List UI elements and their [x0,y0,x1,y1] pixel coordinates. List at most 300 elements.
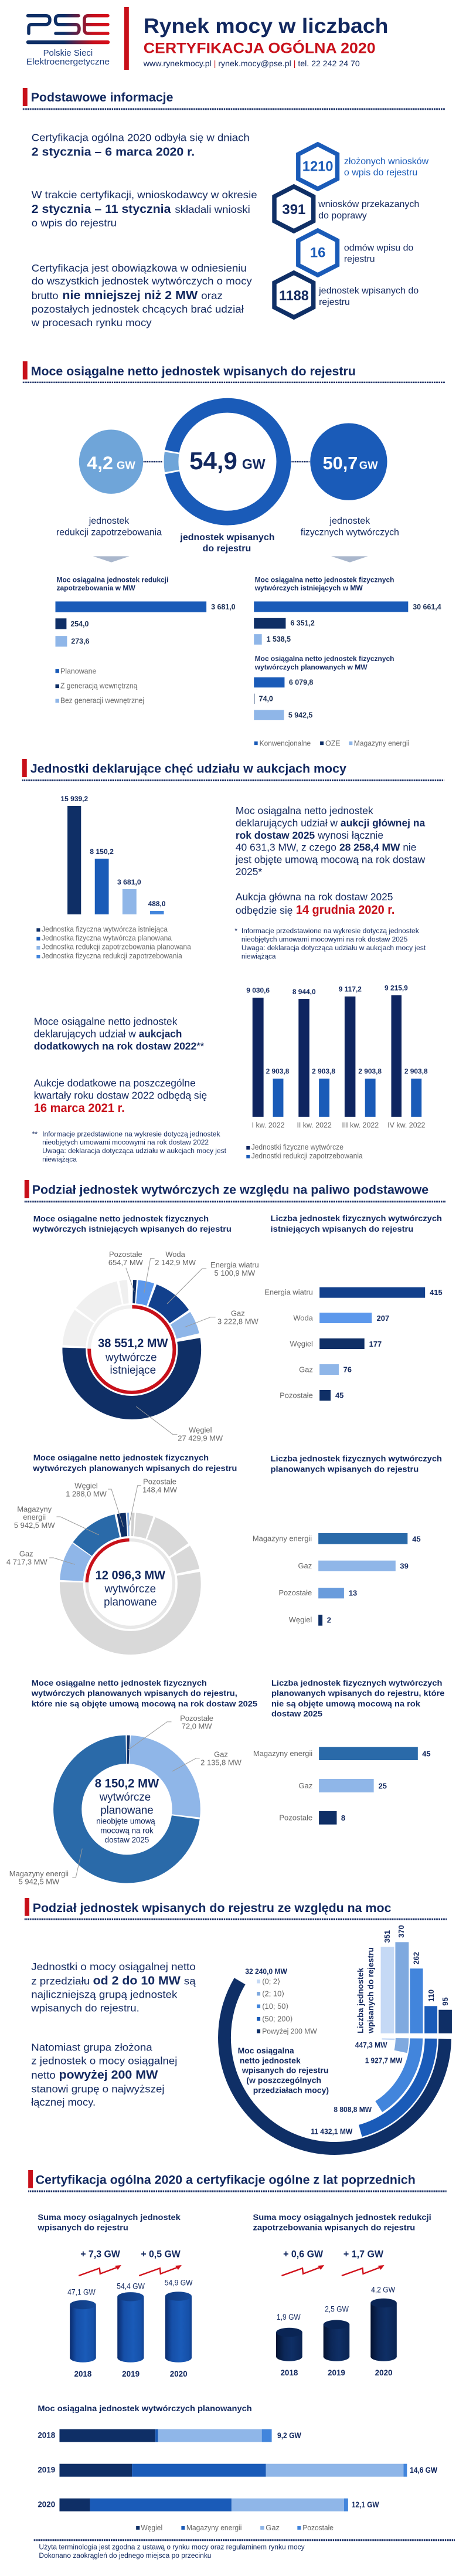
text block: main auction date: 14 grudnia 2020 r. [296,903,394,917]
text block: main auction capacity [235,805,426,877]
cylinder chart: total capacity [67,2278,193,2378]
header [26,7,389,70]
text block: application window: o wpis do rejestru [32,217,117,229]
legend: demand reduction [56,667,144,705]
donut: 54,9 GW: 54,9 [189,447,237,474]
stat: 1210 applications: o wpis do rejestru [344,168,417,178]
callouts: existing capacity: Gaz [231,1309,245,1318]
label: registered units: do rejestru [203,544,251,554]
text block: 2 to 10 MW group: najliczniejszą grupą jednostek [31,1989,177,2001]
text block: over 200 MW group: z jednostek o mocy osiągalnej [31,2055,177,2066]
stacked bar chart: planned capacity by year: 2019 [38,2466,55,2475]
bar chart: existing count: 45 [335,1391,343,1400]
bar chart: uncontracted count: 25 [379,1781,387,1790]
text block: obligation: nie mniejszej niż 2 MW [62,289,198,302]
growth labels and arrows: demand reduction: + 0,6 GW [283,2249,323,2260]
text block: main auction capacity: Moc osiągalna netto jednostek [236,805,373,816]
stacked bar chart: planned capacity by year [38,2429,437,2511]
bar chart: unit count by size band: 370 [397,1925,406,1938]
connector [144,461,162,462]
legend: demand reduction: Planowane [60,667,97,675]
stat: 1210 applications: 1210 [302,158,333,175]
stat: 16 refusals [298,231,413,275]
callouts: uncontracted capacity: 72,0 MW [182,1722,212,1731]
stat: 391 returned: wniosków przekazanych [318,199,419,209]
label: registered units [179,533,275,554]
bar chart: demand reduction capacity [56,576,236,647]
callouts: planned capacity: 1 288,0 MW [66,1490,107,1499]
text block: 2 to 10 MW group [30,1961,196,2014]
bar chart: existing generating capacity [254,576,441,645]
bar chart: existing count: Pozostałe [280,1391,313,1400]
footnote: additional auctions: ** [32,1130,38,1138]
growth labels and arrows: demand reduction: + 1,7 GW [343,2249,383,2260]
text block: main auction date: odbędzie się [236,904,292,916]
donut: 54,9 GW [171,405,284,518]
section heading: Jednostki deklarujące: Jednostki deklarujące chęć udziału w aukcjach mocy [30,762,346,776]
bar chart: main auction declarations: 15 939,2 [60,795,89,803]
text block: additional auctions date [34,1077,207,1115]
label: demand reduction: redukcji zapotrzebowania [56,528,162,538]
radial arc chart: capacity by size band: 447,3 MW [355,2041,387,2049]
text block: over 200 MW group: łącznej mocy. [31,2096,96,2108]
callouts: existing capacity: 654,7 MW [108,1258,144,1267]
contact line: www.rynekmocy.pl | rynek.mocy@pse.pl | tel. 22 242 24 70 [143,59,360,68]
footnote: main auction: nieobjętych umowami mocowymi na rok dostaw 2025 [241,936,408,944]
text block: additional auctions capacity: dodatkowych na rok dostaw 2022 [34,1040,196,1052]
text block: obligation: Certyfikacja jest obowiązkowa w odniesieniu [32,262,247,274]
callouts: planned capacity [6,1477,178,1567]
callouts: existing capacity: 3 222,8 MW [217,1317,258,1326]
stat: 16 refusals: odmów wpisu do [344,243,413,253]
text block: main auction date [236,891,394,917]
chart title: existing count: istniejących wpisanych do rejestru [271,1225,413,1233]
radial arc chart: capacity by size band: 32 240,0 MW [245,1967,287,1975]
text block: additional auctions date: Aukcje dodatkowe na poszczególne [34,1077,196,1089]
bar chart: additional auctions by quarter: 2 903,8 [266,1067,290,1075]
legend: main auction: Jednostka fizyczna redukcji zapotrzebowania [42,952,182,960]
legend: size bands: (0; 2⟩ [262,1977,280,1986]
chart title: uncontracted capacity: wytwórczych planowanych wpisanych do rejestru, [31,1689,237,1698]
callouts: planned capacity: Gaz [19,1550,33,1558]
legend: size bands: (10; 50⟩ [262,2002,289,2011]
legend: generating capacity: Magazyny energii [354,740,409,748]
bar chart: unit count by size band: Liczba jednostek [356,1967,365,2033]
bar chart: demand reduction capacity: 3 681,0 [211,603,236,611]
donut chart: uncontracted capacity by fuel: mocową na rok [100,1825,154,1835]
arc chart caption: przedziałach mocy) [253,2086,329,2094]
chart title: existing count: Liczba jednostek fizycznych wytwórczych [271,1214,442,1223]
donut chart: uncontracted capacity by fuel: planowane [100,1804,154,1816]
chart title: uncontracted count: planowanych wpisanych do rejestru, które [271,1689,445,1698]
text block: certification dates: Certyfikacja ogólna 2020 odbyła się w dniach [32,131,250,144]
bar chart: existing count: 415 [430,1288,443,1297]
callouts: existing capacity: Węgiel [189,1426,212,1435]
donut chart: planned capacity by fuel [72,1524,189,1643]
legend: planned capacity by year [136,2523,334,2532]
circle: 50,7 GW [310,423,387,500]
connector [291,461,309,462]
footer note [39,2543,305,2560]
bar chart: unit count by size band: 262 [412,1952,421,1965]
text block: over 200 MW group: powyżej 200 MW [59,2069,158,2082]
stat: 1188 registered: jednostek wpisanych do [318,286,419,296]
stat: 391 returned [274,187,419,231]
donut chart: uncontracted capacity by fuel: wytwórcze [99,1791,151,1804]
bar chart: additional auctions by quarter [246,984,428,1130]
stat: 391 returned: do poprawy [318,211,367,221]
text block: application window: składali wnioski [175,204,250,215]
stacked bar chart: planned capacity by year: 14,6 GW [410,2466,437,2475]
text block: obligation: pozostałych jednostek chcących brać udział [32,303,244,315]
bar chart: additional auctions by quarter: IV kw. 2022 [387,1121,426,1130]
text block: obligation: w procesach rynku mocy [31,317,152,328]
bar chart: uncontracted count: Magazyny energii [253,1749,312,1758]
bar chart: unit count by size band: wpisanych do rejestru [366,1947,375,2034]
donut chart: existing capacity by fuel: 38 551,2 MW [98,1337,168,1350]
text block: 2 to 10 MW group: Jednostki o mocy osiągalnej netto [31,1961,196,1972]
bar chart: unit count by size band: 351 [383,1930,392,1943]
arc chart caption: (w poszczególnych [246,2076,321,2085]
footer note: Użyta terminologia jest zgodna z ustawą o rynku mocy oraz regulaminem rynku mocy [39,2543,305,2551]
callouts: existing capacity: Woda [165,1250,186,1259]
chart title: demand reduction capacity: Suma mocy osiągalnych jednostek redukcji [253,2213,431,2222]
label: registered units: jednostek wpisanych [179,533,275,543]
legend: size bands: (50; 200⟩ [262,2014,293,2023]
legend: demand reduction: Z generacją wewnętrzną [60,682,137,690]
donut chart: uncontracted capacity by fuel: 8 150,2 MW [95,1777,159,1790]
bar chart: main auction declarations [60,795,166,914]
chart title: uncontracted count: nie są objęte umową mocową na rok [271,1699,420,1708]
circle: 4,2 GW [79,429,143,494]
callouts: planned capacity: Węgiel [74,1482,98,1490]
chart title: planned count [271,1455,442,1473]
text block: additional auctions capacity: ** [196,1040,204,1052]
logo caption: Polskie Sieci [43,48,93,58]
legend: main auction [36,925,191,960]
legend: additional auctions: Jednostki fizyczne wytwórcze [251,1143,343,1151]
legend: additional auctions [246,1143,363,1160]
chart title: total capacity: wpisanych do rejestru [37,2224,128,2232]
stacked bar chart: planned capacity by year: 2018 [38,2431,56,2440]
cylinder chart: total capacity: 2019 [122,2370,140,2378]
bar chart: existing count [264,1287,443,1401]
text block: obligation: oraz [201,290,223,301]
section heading: Podział wg paliwa: Podział jednostek wytwórczych ze względu na paliwo podstawowe [32,1184,428,1197]
section heading: Moce osiągalne netto: Moce osiągalne netto jednostek wpisanych do rejestru [31,365,356,378]
section heading: Podstawowe informacje: Podstawowe informacje [31,91,173,104]
bar chart: additional auctions by quarter: I kw. 2022 [252,1121,285,1130]
bar chart: demand reduction capacity: 273,6 [71,638,90,646]
cylinder chart: demand reduction capacity: 2019 [328,2368,345,2377]
bar chart: existing count: Energia wiatru [264,1288,313,1297]
bar chart: planned count: Gaz [298,1561,312,1570]
callouts: existing capacity: Pozostałe [109,1250,142,1259]
stacked bar chart: planned capacity by year: 2020 [38,2500,55,2509]
panel: registered capacity [23,361,445,748]
bar chart: unit count by size band [356,1925,452,2034]
donut chart: planned capacity by fuel: 12 096,3 MW [96,1568,165,1582]
circle: 50,7 GW: 50,7 [323,453,358,473]
callouts: uncontracted capacity [9,1714,242,1886]
footnote: main auction: * [234,927,237,935]
bar chart: existing count: Woda [293,1313,314,1323]
text block: main auction capacity: 2025* [236,866,262,877]
section heading: porównanie certyfikacji: Certyfikacja ogólna 2020 a certyfikacje ogólne z lat poprzednich [36,2173,416,2187]
cylinder chart: demand reduction capacity: 4,2 GW [371,2284,396,2294]
radial arc chart: capacity by size band [225,1927,445,2148]
callouts: uncontracted capacity: Pozostałe [180,1714,213,1723]
footnote: additional auctions: nieobjętych umowami mocowymi na rok dostaw 2022 [42,1138,209,1147]
cylinder chart: demand reduction capacity: 2020 [375,2368,392,2377]
donut chart: planned capacity by fuel: wytwórcze [104,1583,156,1595]
legend: size bands [257,1977,317,2035]
chart title: total capacity [37,2213,181,2232]
arc chart caption: netto jednostek [240,2056,301,2065]
chart title: uncontracted capacity: Moce osiągalne netto jednostek fizycznych [32,1679,207,1687]
cylinder chart: total capacity: 47,1 GW [67,2287,96,2297]
chart title: existing capacity: Moce osiągalne netto jednostek fizycznych [33,1214,209,1223]
logo caption: Elektroenergetyczne [26,57,110,67]
callouts: existing capacity: 2 142,9 MW [155,1258,196,1267]
chart title: uncontracted count: dostaw 2025 [271,1710,323,1719]
donut: 54,9 GW: GW [242,457,266,473]
stat: 1188 registered: rejestru [319,297,350,307]
text block: 2 to 10 MW group: z przedziału [31,1975,90,1987]
stat: 16 refusals: rejestru [344,254,375,265]
callouts: existing capacity: 27 429,9 MW [178,1434,223,1443]
legend: size bands: (2; 10⟩ [262,1989,284,1998]
cylinder chart: demand reduction capacity: 2018 [280,2368,298,2377]
text block: obligation: brutto [32,290,58,301]
bar chart: unit count by size band: 110 [427,1989,436,2002]
bar chart: existing count: 76 [343,1365,352,1374]
stat: 16 refusals: 16 [310,245,325,261]
bar chart: planned count: 2 [327,1616,331,1625]
section heading: porównanie certyfikacji [28,2170,447,2191]
section heading: Podział wg mocy [25,1898,447,1919]
text block: main auction capacity: deklarujących udział w [236,817,338,829]
bar chart: uncontracted count: Pozostałe [279,1813,312,1822]
header red divider [124,7,129,70]
donut chart: existing capacity by fuel: wytwórcze [105,1352,157,1364]
bar chart: planned count: Pozostałe [278,1588,312,1597]
chart title: planned count: planowanych wpisanych do rejestru [271,1465,419,1473]
bar chart: existing generating capacity: 30 661,4 [413,603,441,611]
donut chart: uncontracted capacity by fuel: dostaw 2025 [105,1835,149,1845]
footnote: main auction: Uwaga: deklaracja dotycząca udziału w aukcjach mocy jest [241,944,426,952]
bar chart: demand reduction capacity: Moc osiągalna jednostek redukcji [56,576,168,584]
section heading: Podział wg mocy: Podział jednostek wpisanych do rejestru ze względu na moc [33,1902,392,1915]
footnote: additional auctions: niewiążąca [42,1155,77,1163]
stat: 1210 applications: złożonych wniosków [344,157,429,167]
legend: demand reduction: Bez generacji wewnętrznej [60,697,144,705]
bar chart: unit count by size band: 95 [441,1997,450,2006]
text block: additional auctions capacity [34,1016,204,1052]
chart title: total capacity: Suma mocy osiągalnych jednostek [38,2213,181,2222]
text block: additional auctions capacity: aukcjach [139,1028,182,1040]
cylinder chart: total capacity: 2018 [74,2370,92,2378]
section heading: Moce osiągalne netto [23,361,445,382]
footnote: main auction [234,927,426,961]
donut chart: planned capacity by fuel: planowane [104,1596,157,1608]
text block: certification dates: 2 stycznia – 6 marca 2020 r. [32,145,195,159]
bar chart: uncontracted count: 45 [422,1749,431,1758]
bar chart: existing generating capacity: 1 538,5 [267,635,291,643]
legend: planned capacity by year: Gaz [266,2523,280,2532]
circle: 4,2 GW: 4,2 [87,452,113,473]
text block: main auction capacity: aukcji głównej na [341,817,426,829]
section heading: Jednostki deklarujące [22,759,444,780]
bar chart: uncontracted count: Gaz [298,1781,312,1790]
stacked bar chart: planned capacity by year: 9,2 GW [277,2431,301,2440]
bar chart: existing generating capacity: Moc osiągalna netto jednostek fizycznych [255,576,394,584]
arrow: down left [93,556,130,562]
footnote: main auction: Informacje przedstawione na wykresie dotyczą jednostek [241,927,419,935]
text block: over 200 MW group: stanowi grupę o najwyższej [31,2083,165,2095]
bar chart: existing count: Gaz [299,1365,313,1374]
chart title: planned capacity [32,1453,237,1473]
text block: 2 to 10 MW group: od 2 do 10 MW [93,1974,181,1987]
subtitle: CERTYFIKACJA OGÓLNA 2020 [144,39,376,57]
cylinder chart: demand reduction capacity [276,2284,397,2377]
text block: main auction capacity: jest objęte umową mocową na rok dostaw [235,854,425,866]
text block: application window [32,189,257,229]
icon: PSE logo [28,16,108,42]
bar chart: additional auctions by quarter: 9 117,2 [339,985,362,994]
title: Rynek mocy w liczbach [144,15,388,38]
cylinder chart: demand reduction capacity: 2,5 GW [325,2304,349,2314]
label: physical generating [301,516,399,538]
label: physical generating: jednostek [329,516,370,526]
arc chart caption [238,2046,329,2094]
bar chart: additional auctions by quarter: 8 944,0 [292,988,316,996]
text block: main auction capacity: rok dostaw 2025 [236,829,315,841]
bar chart: planned generating capacity: Moc osiągalna netto jednostek fizycznych [255,655,394,663]
stat: 1188 registered [274,273,419,317]
callouts: uncontracted capacity: 5 942,5 MW [19,1877,60,1886]
bar chart: main auction declarations: 3 681,0 [117,878,141,886]
bar chart: additional auctions by quarter: II kw. 2022 [297,1121,332,1130]
bar chart: planned count: 13 [349,1588,357,1597]
bar chart: planned count: Magazyny energii [253,1534,312,1543]
bar chart: additional auctions by quarter: III kw. 2022 [342,1121,379,1130]
bar chart: existing count: Węgiel [290,1339,313,1348]
callouts: planned capacity: Magazyny [17,1504,52,1513]
label: demand reduction [56,516,162,538]
legend: size bands: Powyżej 200 MW [262,2026,317,2035]
donut chart: existing capacity by fuel [74,1292,189,1408]
bar chart: planned generating capacity: 5 942,5 [288,711,312,719]
cylinder chart: total capacity: 54,9 GW [165,2278,193,2287]
cylinder chart: demand reduction capacity: 1,9 GW [277,2312,301,2321]
callouts: planned capacity: energii [23,1513,46,1521]
chart title: uncontracted capacity [31,1679,258,1708]
circle: 4,2 GW: GW [117,460,135,472]
callouts: planned capacity: Pozostałe [143,1477,176,1486]
text block: obligation: do wszystkich jednostek wytwórczych o mocy [32,275,252,287]
radial arc chart: capacity by size band: 11 432,1 MW [311,2127,353,2136]
legend: planned capacity by year: Pozostałe [302,2523,334,2532]
legend: generating capacity [254,740,409,748]
bar chart: uncontracted count [253,1747,431,1825]
bar chart: planned generating capacity: 74,0 [259,695,273,703]
label: physical generating: fizycznych wytwórczych [301,528,399,538]
callouts: existing capacity: 5 100,9 MW [215,1269,256,1277]
footnote: main auction: niewiążąca [241,953,276,961]
footnote: additional auctions [32,1130,227,1163]
chart title: demand reduction capacity: zapotrzebowania wpisanych do rejestru [253,2224,415,2232]
bar chart: existing count: 177 [369,1340,382,1348]
text block: over 200 MW group: Natomiast grupa złożona [31,2042,152,2053]
bar chart: additional auctions by quarter: 9 030,6 [246,987,270,995]
text block: application window: W trakcie certyfikacji, wnioskodawcy w okresie [32,189,257,201]
logo caption [26,48,110,67]
callouts: uncontracted capacity: 2 135,8 MW [200,1758,242,1767]
legend: generating capacity: OZE [325,740,341,748]
text block: main auction capacity: 28 258,4 MW [339,842,400,853]
legend: generating capacity: Konwencjonalne [260,740,311,748]
radial arc chart: capacity by size band: 1 927,7 MW [365,2057,403,2065]
text block: 2 to 10 MW group: wpisanych do rejestru. [30,2002,140,2014]
legend: main auction: Jednostka fizyczna wytwórcza planowana [42,934,172,943]
bar chart: additional auctions by quarter: 2 903,8 [358,1067,382,1075]
arc chart caption: wpisanych do rejestru [241,2066,329,2075]
bar chart: planned generating capacity: wytwórczych planowanych w MW [254,663,368,671]
bar chart: demand reduction capacity: 254,0 [70,620,89,628]
bar chart: main auction declarations: 488,0 [148,900,166,908]
bar chart: additional auctions by quarter: 9 215,9 [385,984,408,992]
growth labels and arrows: total capacity [79,2249,182,2276]
label: demand reduction: jednostek [89,516,129,526]
text block: additional auctions capacity: deklarujących udział w [34,1028,136,1040]
text block: additional auctions date: kwartały roku dostaw 2022 odbędą się [34,1089,207,1101]
growth labels and arrows: total capacity: + 7,3 GW [80,2249,120,2260]
chart title: planned capacity: wytwórczych planowanych wpisanych do rejestru [32,1464,237,1473]
bar chart: existing count: 207 [377,1314,389,1323]
text block: obligation [31,262,252,328]
legend: main auction: Jednostka redukcji zapotrzebowania planowana [42,943,191,951]
donut chart: existing capacity by fuel: istniejące [110,1364,156,1377]
text block: main auction capacity: 40 631,3 MW, z czego [236,842,336,853]
stat: 1188 registered: 1188 [279,288,309,304]
legend: planned capacity by year: Magazyny energii [186,2523,241,2532]
bar chart: planned generating capacity: 6 079,8 [289,679,313,687]
radial arc chart: capacity by size band: 8 808,8 MW [334,2106,372,2114]
text block: 2 to 10 MW group: są [184,1975,196,1987]
section heading: Podstawowe informacje [23,88,445,109]
arrow: down right [331,556,368,562]
text block: over 200 MW group [31,2042,177,2108]
circle: 50,7 GW: GW [359,460,378,472]
text block: over 200 MW group: netto [31,2069,56,2081]
bar chart: demand reduction capacity: zapotrzebowania w MW [56,584,136,592]
bar chart: main auction declarations: 8 150,2 [90,848,114,856]
legend: main auction: Jednostka fizyczna wytwórcza istniejąca [42,925,168,934]
donut chart: uncontracted capacity by fuel [67,1750,186,1869]
legend: planned capacity by year: Węgiel [141,2523,162,2532]
text block: additional auctions date: 16 marca 2021 r. [34,1101,125,1115]
text block: application window: 2 stycznia – 11 stycznia [32,203,171,216]
bar chart: uncontracted count: 8 [341,1814,345,1822]
bar chart: additional auctions by quarter: 2 903,8 [404,1067,428,1075]
legend: additional auctions: Jednostki redukcji zapotrzebowania [251,1152,363,1160]
footer note: Dokonano zaokrągleń do jednego miejsca po przecinku [39,2551,211,2560]
arc chart caption: Moc osiągalna [238,2046,294,2055]
donut chart: uncontracted capacity by fuel: nieobjęte umową [96,1816,155,1825]
bar chart: existing generating capacity: wytwórczych istniejących w MW [254,584,363,592]
footnote: additional auctions: Uwaga: deklaracja dotycząca udziału w aukcjach mocy jest [42,1147,227,1155]
